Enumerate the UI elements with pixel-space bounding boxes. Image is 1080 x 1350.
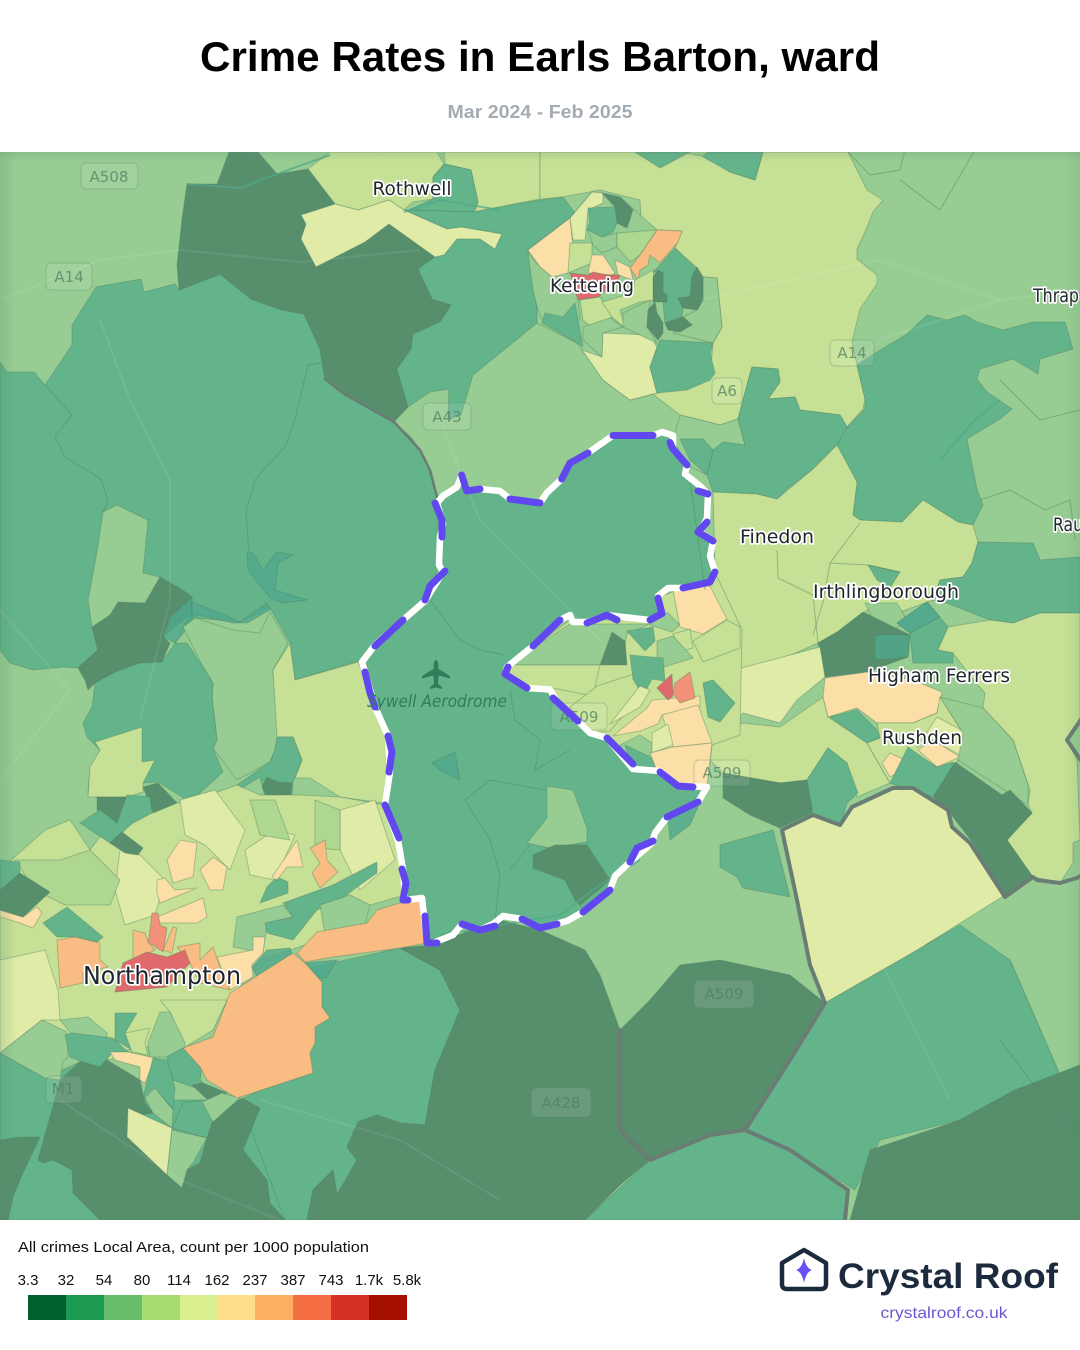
title: Crime Rates in Earls Barton, ward: [200, 33, 880, 80]
Kettering urban areas: [528, 192, 722, 400]
map edge fade: [0, 152, 1080, 1220]
county boundary lines: [325, 379, 1080, 1220]
logo: Crystal Roof: [782, 1250, 1058, 1322]
pale road traces: [0, 250, 1080, 1220]
legend values: 1.7k: [355, 1272, 384, 1289]
road badges: M1: [52, 1080, 74, 1098]
Earls Barton ward outskirts: [362, 432, 742, 943]
legend values: 114: [167, 1272, 191, 1289]
logo wordmark: Crystal Roof: [838, 1257, 1058, 1296]
large rural areas: [0, 152, 1080, 1220]
icon: airport plane: [422, 660, 450, 689]
rivers: [187, 155, 1000, 935]
road badges: A509: [705, 985, 743, 1003]
legend: [18, 1239, 422, 1320]
place labels: Kettering: [550, 275, 634, 297]
legend values: 80: [134, 1272, 150, 1289]
legend colour scale: [28, 1295, 407, 1320]
place labels: Rushden: [882, 727, 962, 749]
road badges: A43: [432, 408, 462, 426]
legend values: 162: [204, 1272, 230, 1289]
place labels: Rothwell: [372, 178, 452, 200]
road badges: A509: [703, 764, 741, 782]
legend values: 3.3: [18, 1272, 38, 1289]
place labels: Higham Ferrers: [868, 665, 1010, 687]
purple ward boundary dashes: [365, 436, 715, 943]
road badges: [46, 163, 874, 1117]
white ward boundary: [362, 432, 715, 943]
legend title: All crimes Local Area, count per 1000 population: [18, 1239, 369, 1256]
legend values: 743: [318, 1272, 344, 1289]
choropleth map: [0, 150, 1080, 1220]
legend values: 237: [242, 1272, 268, 1289]
map base: [0, 152, 1080, 1220]
road badges: A509: [560, 708, 598, 726]
legend values: [18, 1272, 422, 1289]
legend values: 54: [96, 1272, 112, 1289]
road badges: A14: [54, 268, 84, 286]
road badges: A428: [542, 1094, 580, 1112]
place labels: Finedon: [740, 526, 814, 548]
ward inner lines and tract outlines: [45, 150, 1080, 1130]
road badges: A6: [717, 382, 737, 400]
place labels: Irthlingborough: [813, 581, 959, 603]
subtitle: date range: Mar 2024 - Feb 2025: [448, 102, 632, 122]
logo url: crystalroof.co.uk: [880, 1305, 1009, 1322]
legend values: 32: [58, 1272, 74, 1289]
legend values: 387: [280, 1272, 306, 1289]
icon: house with star: [782, 1250, 826, 1289]
road badges: A14: [837, 344, 867, 362]
Northampton urban areas: [0, 783, 427, 1188]
place labels: Northampton: [83, 961, 241, 990]
label: Sywell Aerodrome: Sywell Aerodrome: [367, 692, 507, 712]
place labels: [83, 178, 1080, 990]
road badges: A508: [90, 168, 128, 186]
legend values: 5.8k: [393, 1272, 422, 1289]
